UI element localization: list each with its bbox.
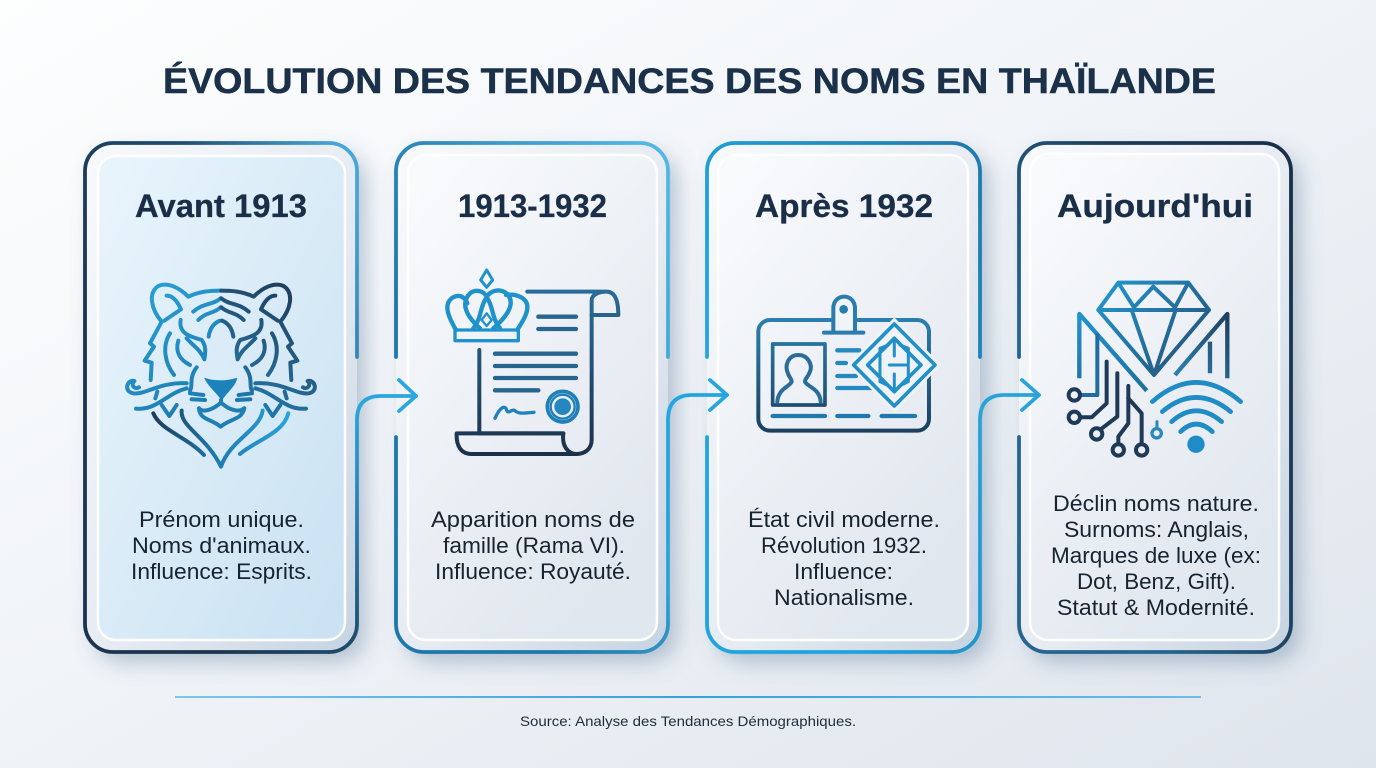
icon: royal crown and scroll — [447, 270, 618, 454]
text: 1913-1932 description: Apparition noms de — [431, 507, 635, 532]
text: Après 1932 description: État civil moderne. — [748, 507, 940, 532]
text: Après 1932 description — [748, 507, 940, 610]
source note: Source: Analyse des Tendances Démographiques. — [520, 713, 856, 729]
divider line — [175, 696, 1201, 698]
text: Aujourd'hui description: Déclin noms nature. — [1053, 491, 1259, 516]
text: Après 1932 description: Révolution 1932. — [761, 533, 927, 558]
text: Avant 1913 description — [131, 507, 312, 584]
title: ÉVOLUTION DES TENDANCES DES NOMS EN THAÏLANDE — [163, 61, 1216, 101]
heading: 1913-1932: 1913-1932 — [458, 188, 607, 224]
text: 1913-1932 description: Influence: Royauté. — [435, 559, 631, 584]
text: Aujourd'hui description: Dot, Benz, Gift). — [1077, 569, 1236, 594]
icon: tiger — [127, 285, 315, 467]
icon: identity card with emblem — [758, 297, 941, 431]
heading: Après 1932: Après 1932 — [755, 188, 933, 224]
panel: Aujourd'hui — [1019, 143, 1291, 652]
text: Aujourd'hui description: Surnoms: Anglais, — [1064, 517, 1249, 542]
text: Aujourd'hui description — [1051, 491, 1261, 620]
text: Après 1932 description: Influence: — [794, 559, 893, 584]
panel: Avant 1913 — [85, 143, 357, 652]
text: Aujourd'hui description: Statut & Modernité. — [1057, 595, 1255, 620]
text: Avant 1913 description: Influence: Esprits. — [131, 559, 312, 584]
text: Après 1932 description: Nationalisme. — [774, 585, 914, 610]
text: Avant 1913 description: Noms d'animaux. — [132, 533, 311, 558]
arrow: Après 1932 to Aujourd'hui — [952, 380, 1039, 652]
icon: diamond, circuit and wifi — [1069, 283, 1241, 456]
text: Avant 1913 description: Prénom unique. — [139, 507, 304, 532]
arrow: 1913-1932 to Après 1932 — [640, 380, 727, 652]
text: 1913-1932 description: famille (Rama VI). — [443, 533, 625, 558]
text: 1913-1932 description — [431, 507, 635, 584]
heading: Aujourd'hui: Aujourd'hui — [1057, 188, 1253, 224]
text: Aujourd'hui description: Marques de luxe (ex: — [1051, 543, 1261, 568]
arrow: Avant 1913 to 1913-1932 — [329, 380, 416, 652]
panel: 1913-1932 — [396, 143, 668, 652]
panel: Après 1932 — [707, 143, 980, 652]
heading: Avant 1913: Avant 1913 — [135, 188, 307, 224]
